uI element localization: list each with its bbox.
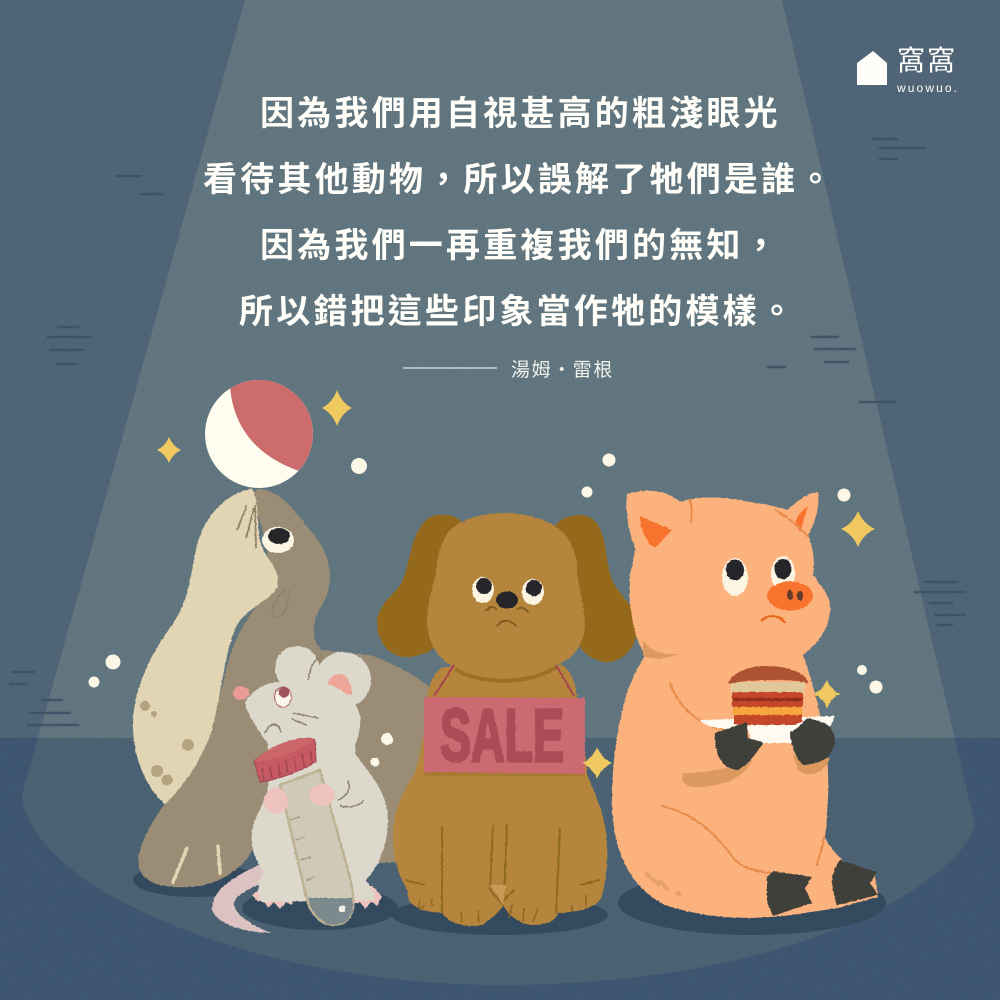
rat paws [264, 788, 288, 814]
seal [133, 489, 440, 887]
sale sign: SALE [440, 694, 564, 777]
dog nose [496, 592, 518, 608]
dog mouth [486, 607, 528, 626]
quote text [203, 95, 835, 331]
tube cap [254, 738, 316, 782]
pig mouth [762, 616, 785, 622]
quote text: 看待其他動物，所以誤解了牠們是誰。 [203, 161, 835, 199]
pig outline lines [662, 500, 824, 873]
ball [205, 380, 313, 488]
logo: 窩窩 [897, 39, 957, 79]
pig [612, 491, 878, 918]
quote text: 所以錯把這些印象當作牠的模樣。 [239, 293, 797, 331]
seal light belly [133, 489, 278, 804]
seal dark body [138, 489, 440, 887]
sparkles and dots [88, 390, 882, 803]
dog right ear [555, 515, 638, 662]
ground shadows [133, 863, 886, 935]
attribution: 湯姆・雷根 [511, 359, 614, 381]
seal whiskers and details [237, 505, 290, 617]
seal eye [262, 527, 294, 553]
pig snout [767, 582, 813, 610]
dog eyes [472, 577, 494, 603]
logo: wuowuo. [896, 81, 957, 95]
rat ears [275, 646, 319, 690]
rat nose [233, 686, 249, 700]
quote text: 因為我們用自視甚高的粗淺眼光 [260, 95, 781, 133]
rat tail [212, 862, 272, 933]
rat feet [252, 886, 382, 909]
dog body [393, 665, 607, 926]
dog [377, 513, 638, 926]
sale sign [424, 694, 585, 777]
rat body [245, 681, 388, 902]
dog leg lines [405, 825, 600, 913]
dog sparkle [582, 747, 612, 779]
dog neck line [455, 667, 556, 681]
pig shaded areas [643, 640, 678, 659]
pig back hooves [767, 871, 812, 916]
cake [700, 667, 835, 743]
seal dots [381, 733, 393, 745]
wall dash marks [10, 139, 965, 725]
pig sparkle [814, 680, 840, 708]
rat eye [274, 687, 292, 707]
quote text: 因為我們一再重複我們的無知， [260, 227, 781, 265]
dog head [427, 513, 585, 678]
test tube [280, 770, 353, 925]
pig front hooves [715, 722, 763, 770]
pig ears inner [640, 516, 672, 548]
pig body and head [612, 491, 878, 918]
logo [857, 39, 957, 95]
pig eyes [722, 558, 748, 596]
sign strings [434, 665, 574, 696]
rat [212, 646, 388, 933]
rat face lines [265, 656, 322, 733]
dog left ear [377, 514, 463, 657]
